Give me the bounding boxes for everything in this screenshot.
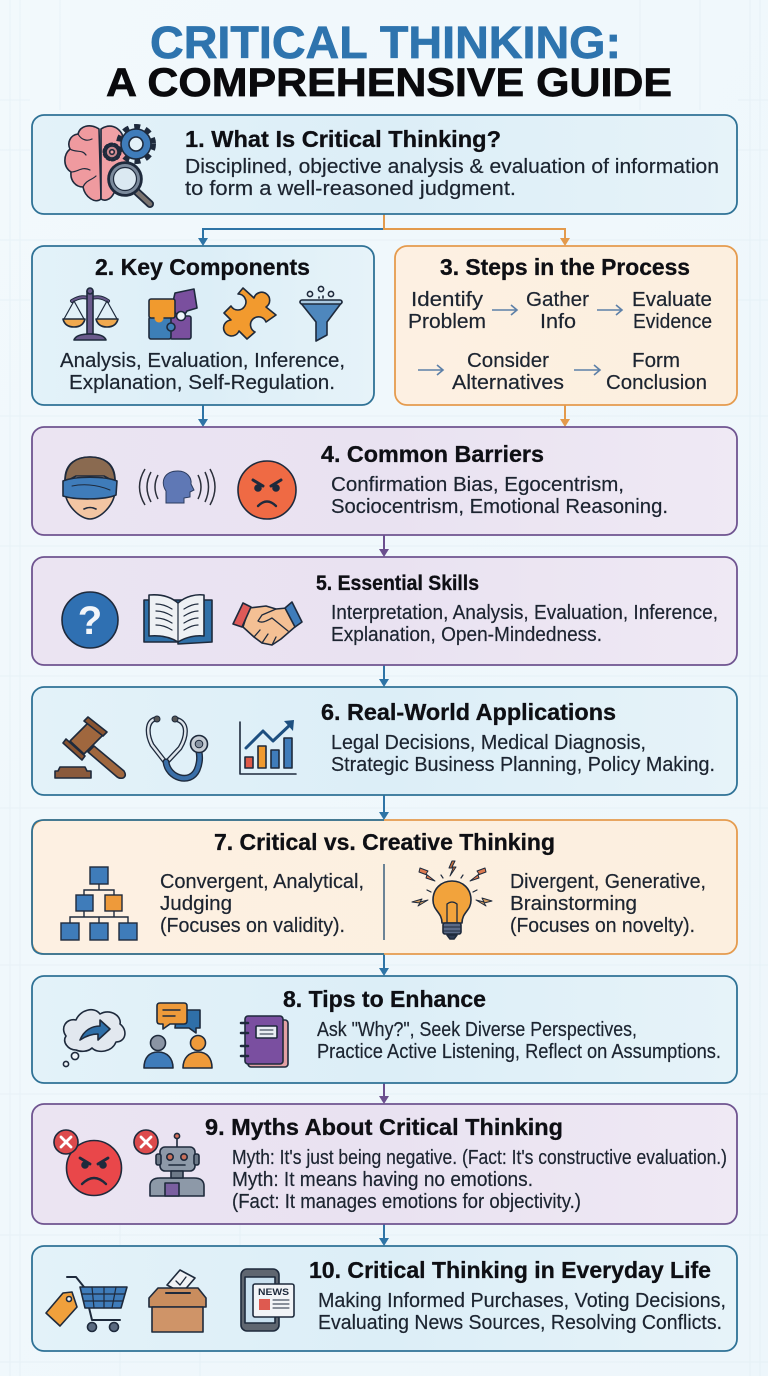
heading: 2. Key Components bbox=[95, 254, 310, 280]
icon: two people talking bbox=[144, 1003, 212, 1068]
icon: phone and newspaper bbox=[241, 1269, 294, 1331]
arrow: panel 1 to panel 3 bbox=[384, 214, 570, 246]
description bbox=[331, 602, 718, 646]
panel 1: what is critical thinking bbox=[32, 115, 737, 214]
description: Practice Active Listening, Reflect on Assumptions. bbox=[317, 1041, 721, 1063]
icon: robot with x badge bbox=[134, 1130, 204, 1196]
arrow: panel 4 to panel 5 bbox=[379, 535, 389, 557]
heading: 7. Critical vs. Creative Thinking bbox=[214, 829, 555, 855]
icon: angry face bbox=[238, 461, 296, 519]
icon: phone and newspaper: NEWS bbox=[258, 1287, 289, 1298]
panel 9: myths about critical thinking bbox=[32, 1104, 737, 1224]
icon: assembled puzzle bbox=[149, 289, 197, 339]
description: Disciplined, objective analysis & evaluation of information bbox=[185, 156, 719, 178]
description: to form a well-reasoned judgment. bbox=[185, 178, 516, 200]
step: consider alternatives: Consider bbox=[467, 350, 549, 372]
icon: angry face with x badge bbox=[54, 1130, 122, 1196]
panel 4: common barriers bbox=[32, 427, 737, 535]
text: critical thinking traits: Judging bbox=[160, 893, 232, 915]
arrow bbox=[574, 365, 600, 375]
step: gather info: Gather bbox=[526, 289, 589, 311]
heading: 10. Critical Thinking in Everyday Life bbox=[309, 1257, 711, 1283]
text: creative thinking traits: (Focuses on novelty). bbox=[510, 915, 695, 937]
description: Sociocentrism, Emotional Reasoning. bbox=[331, 496, 668, 518]
description: Analysis, Evaluation, Inference, bbox=[60, 350, 345, 372]
icon: funnel bbox=[300, 286, 342, 341]
title: A COMPREHENSIVE GUIDE bbox=[106, 61, 672, 105]
title: CRITICAL THINKING: bbox=[150, 17, 621, 68]
text: critical thinking traits: (Focuses on validity). bbox=[160, 915, 345, 937]
description: Confirmation Bias, Egocentrism, bbox=[331, 474, 624, 496]
panel 3: steps in the process bbox=[395, 246, 737, 405]
heading: 9. Myths About Critical Thinking bbox=[205, 1114, 563, 1140]
step: form conclusion: Form bbox=[632, 350, 680, 372]
description bbox=[317, 1019, 721, 1063]
icon: orange puzzle piece bbox=[224, 288, 276, 339]
step: gather info bbox=[526, 289, 589, 333]
description bbox=[331, 732, 715, 776]
icon: open book bbox=[144, 595, 212, 644]
heading: 8. Tips to Enhance bbox=[283, 986, 486, 1012]
step: gather info: Info bbox=[540, 311, 576, 333]
icon: echo chamber head bbox=[140, 469, 215, 505]
arrow: panel 1 to panel 2 bbox=[198, 229, 384, 246]
step: identify problem: Identify bbox=[411, 289, 483, 311]
arrow: panel 3 to panel 4 bbox=[560, 405, 570, 427]
panel 6: real-world applications bbox=[32, 687, 737, 795]
arrow: panel 2 to panel 4 bbox=[198, 405, 208, 427]
icon: thought cloud with arrow bbox=[63, 1010, 125, 1067]
step: evaluate evidence bbox=[632, 289, 712, 333]
text: creative thinking traits: Divergent, Generative, bbox=[510, 871, 706, 893]
text: critical thinking traits bbox=[160, 871, 364, 937]
title bbox=[106, 17, 672, 105]
step: form conclusion: Conclusion bbox=[606, 372, 707, 394]
arrow: panel 7 to panel 8 bbox=[379, 954, 389, 976]
panel 5: essential skills bbox=[32, 557, 737, 665]
text: critical thinking traits: Convergent, Analytical, bbox=[160, 871, 364, 893]
description: Interpretation, Analysis, Evaluation, Inference, bbox=[331, 602, 718, 624]
description bbox=[232, 1147, 727, 1213]
icon: stethoscope bbox=[148, 716, 208, 778]
heading: 4. Common Barriers bbox=[321, 441, 544, 467]
text: creative thinking traits bbox=[510, 871, 706, 937]
description: Legal Decisions, Medical Diagnosis, bbox=[331, 732, 646, 754]
step: identify problem: Problem bbox=[408, 311, 486, 333]
arrow: panel 9 to panel 10 bbox=[379, 1224, 389, 1246]
text: creative thinking traits: Brainstorming bbox=[510, 893, 637, 915]
heading: 3. Steps in the Process bbox=[440, 254, 690, 280]
icon: question mark: ? bbox=[78, 599, 102, 643]
heading: 6. Real-World Applications bbox=[321, 699, 616, 725]
arrow bbox=[492, 305, 517, 315]
description: Strategic Business Planning, Policy Making. bbox=[331, 754, 715, 776]
arrow bbox=[418, 365, 443, 375]
description: Myth: It means having no emotions. bbox=[232, 1169, 533, 1191]
icon: handshake bbox=[233, 602, 302, 645]
heading: 1. What Is Critical Thinking? bbox=[185, 126, 501, 152]
icon: question mark bbox=[62, 592, 118, 648]
description bbox=[331, 474, 668, 518]
step: form conclusion bbox=[606, 350, 707, 394]
arrow: panel 6 to panel 7 bbox=[379, 795, 389, 820]
panel 7: critical vs creative thinking bbox=[32, 820, 737, 954]
step: consider alternatives bbox=[452, 350, 564, 394]
icon: ballot box bbox=[149, 1270, 206, 1332]
description bbox=[318, 1290, 726, 1334]
icon: balance scales bbox=[63, 288, 118, 340]
panel 8: tips to enhance bbox=[32, 976, 737, 1083]
icon: blindfolded face bbox=[63, 457, 117, 519]
description: Evaluating News Sources, Resolving Conflicts. bbox=[318, 1312, 722, 1334]
arrow: panel 8 to panel 9 bbox=[379, 1083, 389, 1104]
icon: light bulb bbox=[412, 861, 492, 939]
arrow: panel 5 to panel 6 bbox=[379, 665, 389, 687]
description: Explanation, Self-Regulation. bbox=[69, 372, 335, 394]
icon: gavel bbox=[55, 717, 125, 778]
icon: notebook bbox=[241, 1016, 288, 1067]
description: Ask "Why?", Seek Diverse Perspectives, bbox=[317, 1019, 637, 1041]
arrow bbox=[597, 305, 622, 315]
description bbox=[60, 350, 345, 394]
description: Making Informed Purchases, Voting Decisions, bbox=[318, 1290, 726, 1312]
panel 10: everyday life bbox=[32, 1246, 737, 1351]
step: evaluate evidence: Evaluate bbox=[632, 289, 712, 311]
heading: 5. Essential Skills bbox=[316, 572, 479, 595]
step: consider alternatives: Alternatives bbox=[452, 372, 564, 394]
description: Explanation, Open-Mindedness. bbox=[331, 624, 602, 646]
step: evaluate evidence: Evidence bbox=[633, 311, 712, 333]
icon: brain with gears and magnifier bbox=[65, 126, 154, 204]
icon: hierarchy tree bbox=[61, 867, 137, 940]
step: identify problem bbox=[408, 289, 486, 333]
icon: shopping cart with tag bbox=[46, 1277, 127, 1332]
description: (Fact: It manages emotions for objectivity.) bbox=[232, 1191, 581, 1213]
description bbox=[185, 156, 719, 200]
icon: growth chart bbox=[240, 720, 296, 774]
panel 2: key components bbox=[32, 246, 374, 405]
